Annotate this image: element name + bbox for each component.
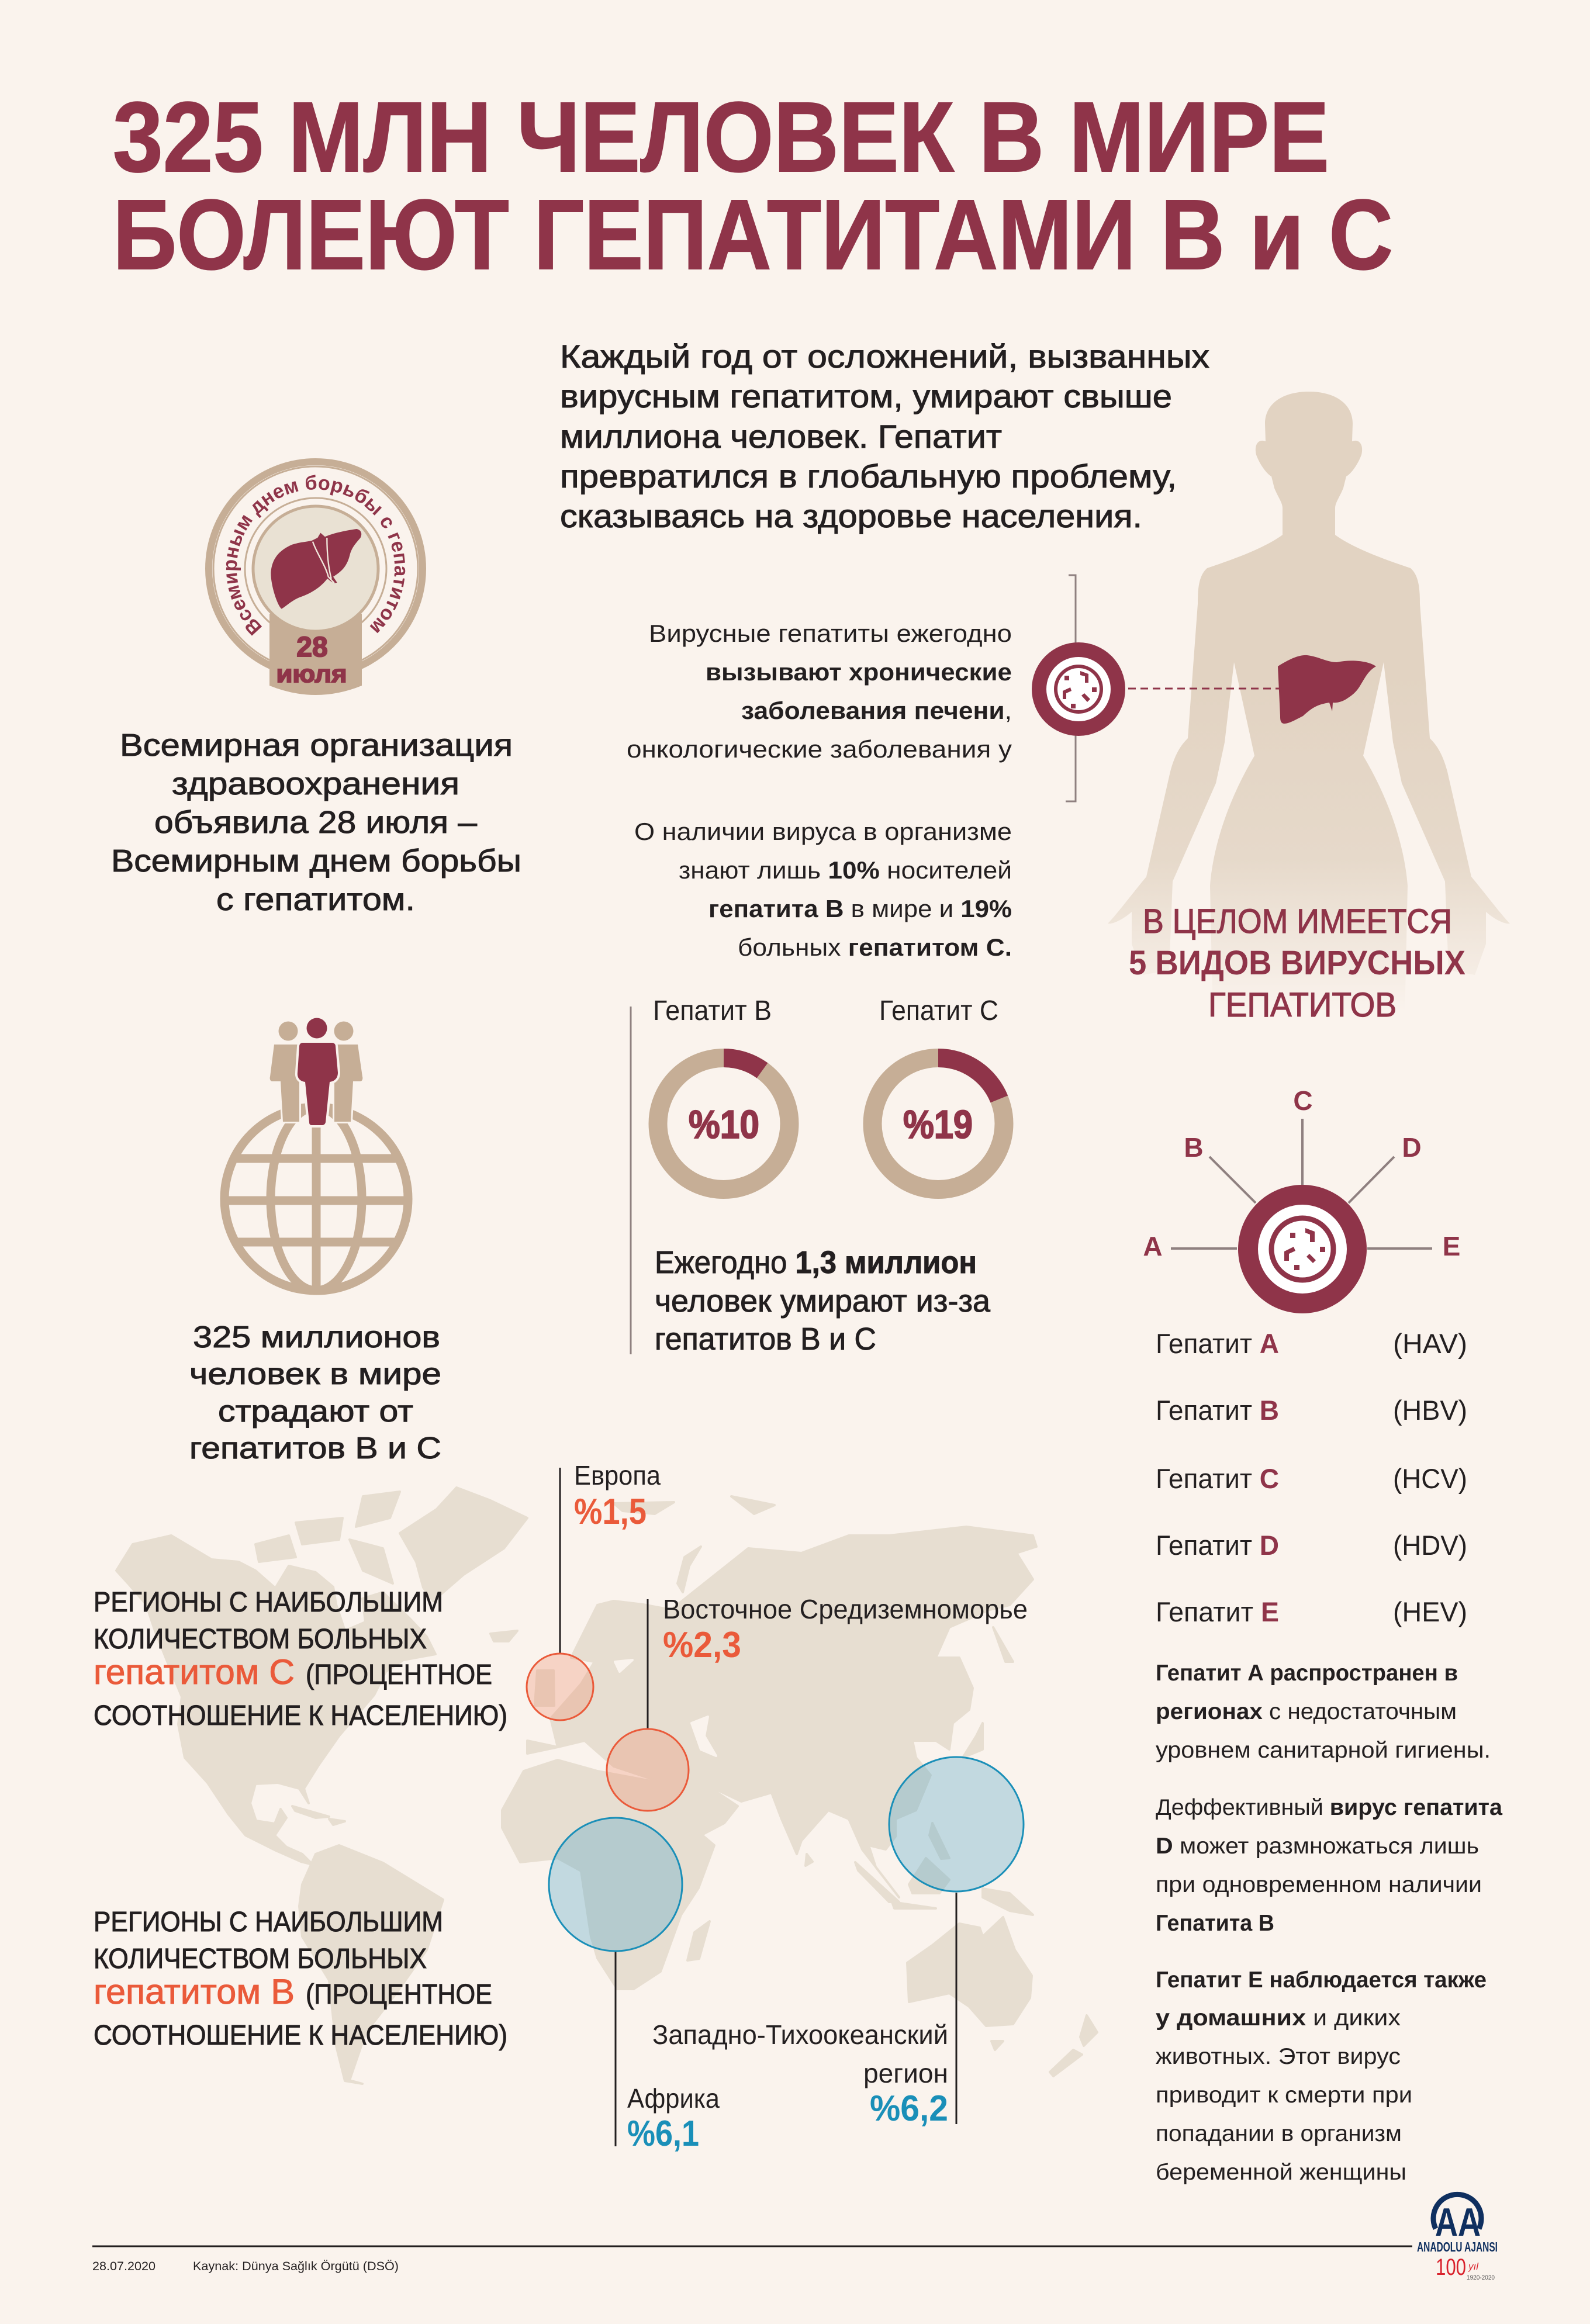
text: hepatitis B regions: (ПРОЦЕНТНОЕ <box>306 1979 492 2010</box>
list: hepatitis types: Гепатит E <box>1156 1596 1279 1627</box>
title <box>113 82 1393 290</box>
intro text: сказываясь на здоровье населения. <box>560 497 1142 534</box>
text: hepatitis E note: попадании в организм <box>1156 2121 1402 2146</box>
text: hepatitis B regions: СООТНОШЕНИЕ К НАСЕЛЕНИЮ) <box>94 2020 507 2051</box>
text: carriers: О наличии вируса в организме <box>634 818 1012 845</box>
text: hepatitis B regions: гепатитом B <box>94 1972 295 2011</box>
text: annual deaths: гепатитов В и С <box>655 1322 876 1357</box>
list: hepatitis types: (HEV) <box>1393 1596 1467 1627</box>
text: hepatitis C regions: СООТНОШЕНИЕ К НАСЕЛЕНИЮ) <box>94 1700 507 1731</box>
intro text: миллиона человек. Гепатит <box>560 418 1002 455</box>
badge date: июля <box>276 660 347 687</box>
callout: Africa: Африка <box>627 2083 720 2114</box>
text: hepatitis B regions: РЕГИОНЫ С НАИБОЛЬШИМ <box>94 1907 443 1938</box>
donut chart: hepatitis B: %10 <box>689 1102 759 1147</box>
title: БОЛЕЮТ ГЕПАТИТАМИ В и С <box>113 179 1393 290</box>
text: hepatitis D note: Деффективный вирус гепатита <box>1156 1795 1502 1820</box>
text: chronic diseases: онкологические заболевания у <box>627 735 1012 763</box>
list: hepatitis types: (HDV) <box>1393 1530 1467 1561</box>
WHO text: объявила 28 июля – <box>154 805 477 840</box>
callout: Western Pacific: регион <box>863 2058 948 2088</box>
text: hepatitis A note <box>1156 1661 1491 1763</box>
callout: Africa <box>549 1818 720 2154</box>
callout: Africa: %6,1 <box>627 2114 699 2154</box>
text: chronic diseases: заболевания печени , <box>741 697 1012 724</box>
text: hepatitis E note: приводит к смерти при <box>1156 2083 1412 2108</box>
footer: 28.07.2020 <box>92 2260 155 2273</box>
text: annual deaths <box>655 1245 991 1357</box>
text: hepatitis A note: регионах с недостаточным <box>1156 1699 1457 1724</box>
intro text <box>560 338 1209 534</box>
divider line charts <box>630 1007 631 1354</box>
intro text: Каждый год от осложнений, вызванных <box>560 338 1209 375</box>
text: annual deaths: человек умирают из-за <box>655 1284 991 1319</box>
logo: Anadolu Ajansi: 1920-2020 <box>1467 2274 1495 2281</box>
text: hepatitis E note: Гепатит Е наблюдается также <box>1156 1967 1487 1993</box>
text: hepatitis A note: уровнем санитарной гигиены. <box>1156 1738 1491 1763</box>
text: chronic diseases: Вирусные гепатиты ежегодно <box>649 620 1012 647</box>
text: hepatitis E note: животных. Этот вирус <box>1156 2044 1401 2069</box>
callout: Western Pacific <box>652 1757 1024 2129</box>
list: hepatitis types: (HBV) <box>1393 1395 1467 1426</box>
text: hepatitis D note: Гепатита В <box>1156 1911 1274 1936</box>
WHO text: с гепатитом. <box>216 882 415 917</box>
callout: Eastern Mediterranean: %2,3 <box>663 1625 741 1665</box>
list: hepatitis types: (HCV) <box>1393 1463 1467 1494</box>
icon: hepatitis types diagram: A <box>1143 1231 1163 1261</box>
text: chronic diseases: вызывают хронические <box>706 658 1012 686</box>
donut chart: hepatitis C: Гепатит C <box>879 995 998 1026</box>
text: hepatitis B regions <box>94 1907 507 2051</box>
donut chart: hepatitis C <box>872 995 1004 1189</box>
callout: Europe <box>527 1460 661 1720</box>
icon: hepatitis types diagram: E <box>1443 1231 1460 1261</box>
text: carriers: знают лишь 10% носителей <box>679 856 1012 884</box>
list: hepatitis types: Гепатит B <box>1156 1395 1279 1426</box>
icon: hepatitis types diagram <box>1143 1085 1460 1313</box>
world map background <box>116 1488 1097 2084</box>
icon: liver in body <box>1278 655 1376 724</box>
logo: Anadolu Ajansi: yıl <box>1468 2261 1479 2272</box>
callout: Europe: %1,5 <box>574 1492 647 1532</box>
text: hepatitis A note: Гепатит А распространен в <box>1156 1661 1458 1686</box>
text: 325 million: человек в мире <box>189 1357 441 1391</box>
WHO text: Всемирная организация <box>120 728 513 763</box>
WHO text: Всемирным днем борьбы <box>111 843 521 879</box>
intro text: превратился в глобальную проблему, <box>560 458 1177 494</box>
WHO text: здравоохранения <box>172 766 459 801</box>
text: hepatitis C regions <box>94 1587 507 1731</box>
circular badge text: Всемирным днем борьбы с гепатитом <box>226 475 406 636</box>
text: hepatitis B regions: КОЛИЧЕСТВОМ БОЛЬНЫХ <box>94 1943 427 1974</box>
text: hepatitis E note <box>1156 1967 1487 2185</box>
badge date: 28 <box>296 632 328 663</box>
text: hepatitis C regions: КОЛИЧЕСТВОМ БОЛЬНЫХ <box>94 1624 427 1655</box>
text: hepatitis E note: у домашних и диких <box>1156 2005 1401 2031</box>
text: chronic diseases <box>627 620 1012 763</box>
text: hepatitis C regions: гепатитом С <box>94 1652 295 1692</box>
text: 325 million <box>189 1320 441 1465</box>
list: hepatitis types: Гепатит A <box>1156 1328 1279 1359</box>
donut chart: hepatitis B: Гепатит B <box>653 995 772 1026</box>
icon: body silhouette <box>1108 392 1510 1023</box>
text: hepatitis D note <box>1156 1795 1502 1936</box>
title: 325 МЛН ЧЕЛОВЕК В МИРЕ <box>113 82 1329 193</box>
icon: hepatitis types diagram: B <box>1184 1132 1204 1163</box>
logo: Anadolu Ajansi: 100 <box>1436 2254 1466 2280</box>
text: hepatitis E note: беременной женщины <box>1156 2160 1406 2185</box>
text: carriers: больных гепатитом С. <box>738 933 1012 961</box>
icon: people on globe <box>224 1018 408 1291</box>
heading: five types: 5 ВИДОВ ВИРУСНЫХ <box>1129 944 1465 982</box>
heading: five types <box>1129 902 1465 1024</box>
logo: Anadolu Ajansi <box>1417 2194 1498 2281</box>
text: hepatitis D note: при одновременном наличии <box>1156 1872 1482 1897</box>
dashed connector <box>1128 687 1281 690</box>
footer <box>92 2246 1412 2273</box>
text: carriers <box>634 818 1012 961</box>
text: annual deaths: Ежегодно 1,3 миллион <box>655 1245 977 1280</box>
callout: Western Pacific: %6,2 <box>870 2088 948 2129</box>
text: 325 million: гепатитов В и С <box>189 1431 441 1465</box>
callout: Eastern Mediterranean: Восточное Средиземноморье <box>663 1594 1028 1624</box>
callout: Western Pacific: Западно-Тихоокеанский <box>652 2019 948 2050</box>
logo: Anadolu Ajansi: ANADOLU AJANSI <box>1417 2239 1498 2254</box>
donut chart: hepatitis C: %19 <box>903 1102 973 1147</box>
heading: five types: ГЕПАТИТОВ <box>1208 986 1397 1024</box>
footer: Kaynak: Dünya Sağlık Örgütü (DSÖ) <box>193 2260 399 2273</box>
heading: five types: В ЦЕЛОМ ИМЕЕТСЯ <box>1143 902 1452 940</box>
list: hepatitis types <box>1156 1328 1467 1627</box>
icon: virus <box>1032 642 1125 736</box>
badge date <box>276 632 347 687</box>
text: hepatitis C regions: РЕГИОНЫ С НАИБОЛЬШИМ <box>94 1587 443 1618</box>
bracket <box>1066 575 1076 801</box>
icon: hepatitis types diagram: D <box>1402 1132 1422 1163</box>
text: 325 million: 325 миллионов <box>193 1320 440 1354</box>
text: hepatitis D note: D может размножаться лишь <box>1156 1834 1479 1859</box>
text: carriers: гепатита В в мире и 19% <box>708 895 1012 922</box>
list: hepatitis types: Гепатит C <box>1156 1463 1279 1494</box>
callout: Europe: Европа <box>574 1460 661 1490</box>
logo: Anadolu Ajansi: AA <box>1435 2200 1481 2245</box>
icon: badge 28 July <box>205 458 426 695</box>
donut chart: hepatitis B <box>653 995 789 1189</box>
text: hepatitis C regions: (ПРОЦЕНТНОЕ <box>306 1659 492 1690</box>
text: 325 million: страдают от <box>218 1395 413 1429</box>
list: hepatitis types: Гепатит D <box>1156 1530 1279 1561</box>
list: hepatitis types: (HAV) <box>1393 1328 1467 1359</box>
intro text: вирусным гепатитом, умирают свыше <box>560 378 1172 414</box>
callout: Eastern Mediterranean <box>607 1594 1028 1811</box>
icon: hepatitis types diagram: C <box>1293 1085 1313 1116</box>
WHO text <box>111 728 521 917</box>
